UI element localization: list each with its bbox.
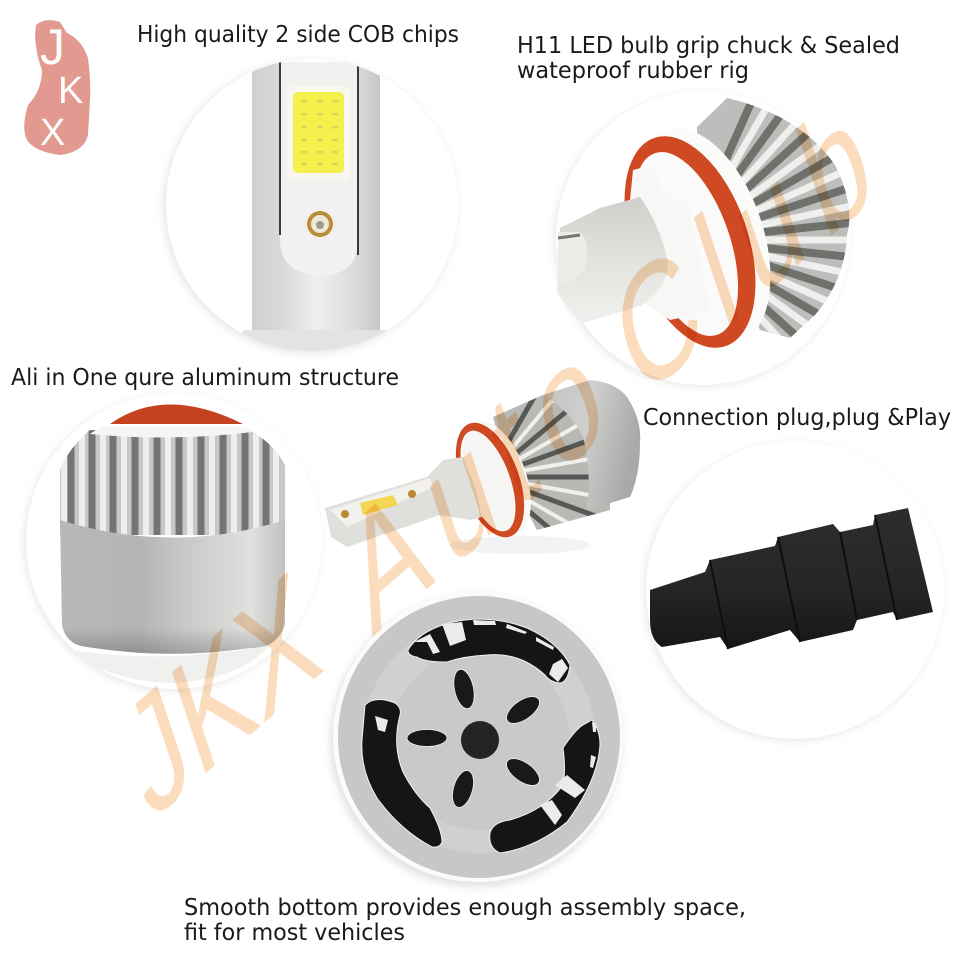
chip blade — [280, 62, 358, 276]
silver neck — [557, 197, 668, 323]
logo: JKX badge — [24, 19, 90, 155]
logo: JKX badge: J — [40, 19, 65, 75]
black vents — [362, 619, 600, 853]
red top — [110, 404, 243, 424]
centre hub — [461, 721, 499, 759]
petal slots — [407, 667, 544, 810]
chip holder — [287, 86, 350, 181]
reflection under bulb — [450, 536, 590, 554]
heading: COB chips: High quality 2 side COB chips — [137, 22, 459, 48]
watermark: JKX Auto Club: Club — [596, 51, 902, 434]
heading: H11 grip chuck: wateproof rubber rig — [517, 58, 749, 84]
panel: connection plug — [644, 441, 944, 741]
panel: H11 grip chuck and rubber ring — [554, 85, 860, 395]
silver band — [60, 520, 285, 654]
bulb neck and blade — [325, 457, 482, 547]
white shoulder — [90, 427, 253, 438]
yellow COB chip — [293, 92, 344, 173]
watermark: JKX Auto Club — [106, 51, 902, 854]
bulb body — [252, 62, 380, 332]
black connector plug — [650, 508, 933, 649]
heat-sink fins — [697, 98, 850, 338]
white bits inside vents — [375, 620, 596, 825]
heading: H11 grip chuck: H11 LED bulb grip chuck & Sealed — [517, 33, 900, 59]
logo: JKX badge: K — [58, 70, 83, 112]
heading: smooth bottom: fit for most vehicles — [184, 920, 405, 946]
gold screw — [307, 211, 333, 237]
panel: smooth bottom disc — [330, 592, 623, 887]
logo: JKX badge: X — [40, 112, 65, 154]
bulb fins — [493, 395, 610, 530]
reflection — [70, 645, 270, 683]
panel: COB chips close-up — [163, 59, 458, 355]
red rubber seal — [599, 119, 781, 365]
centre product bulb — [325, 373, 640, 554]
watermark: JKX Auto Club: Auto — [328, 286, 635, 669]
watermark: JKX Auto Club: JKX — [106, 537, 337, 854]
heading: connection plug: Connection plug,plug &Play — [643, 405, 951, 431]
plug segment edges — [710, 515, 897, 649]
fins — [60, 425, 285, 540]
bulb flange — [242, 330, 386, 351]
panel: all in one aluminum structure — [24, 393, 322, 691]
mount and tabs — [630, 165, 710, 320]
white collar — [610, 111, 796, 361]
heading: aluminum structure: Ali in One qure aluminum structure — [11, 365, 399, 391]
white collar — [447, 411, 545, 545]
pipe end — [558, 232, 588, 288]
bulb tail can — [543, 380, 640, 510]
red seal — [442, 414, 538, 546]
heading: smooth bottom: Smooth bottom provides enough assembly space, — [184, 895, 746, 921]
